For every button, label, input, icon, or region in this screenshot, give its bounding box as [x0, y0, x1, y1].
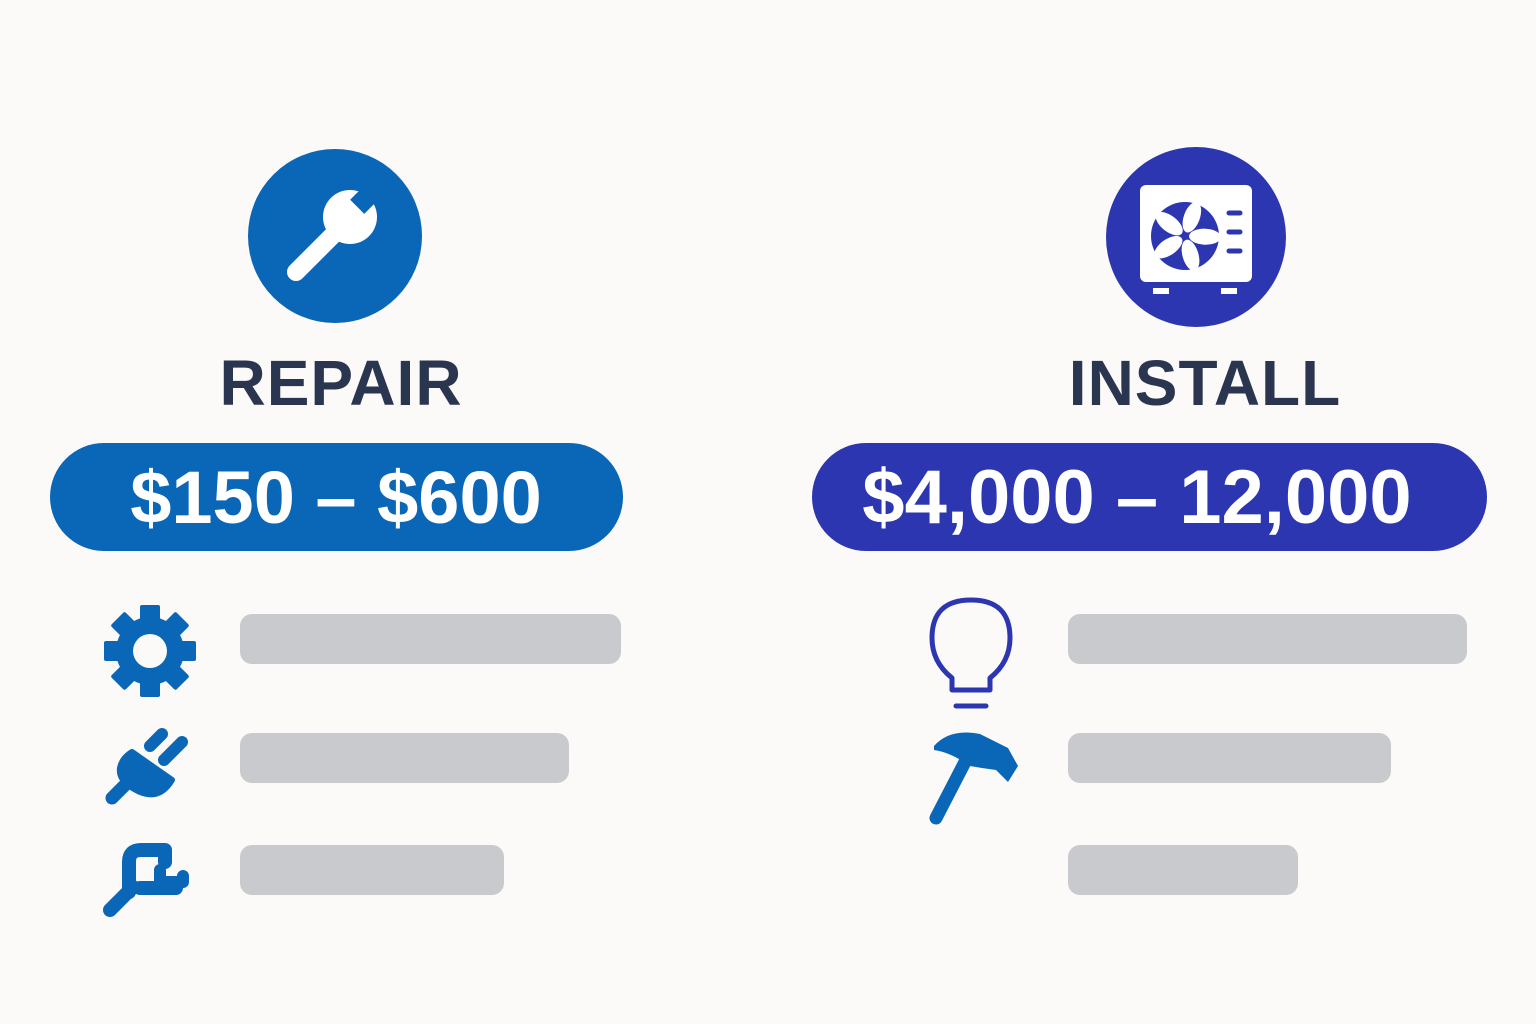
- icon: gear: [104, 605, 196, 697]
- price pill: repair: $150 – $600: [130, 456, 542, 539]
- price pill: install: [812, 443, 1487, 551]
- panel: repair: [50, 149, 623, 910]
- bars: install: [1068, 614, 1467, 895]
- heading: REPAIR: REPAIR: [219, 347, 463, 419]
- icon: plug: [112, 734, 182, 798]
- icon: pipe wrench: [110, 850, 183, 910]
- price pill: install: $4,000 – 12,000: [862, 455, 1412, 540]
- panel: install: [812, 147, 1487, 895]
- icon: light bulb: [932, 600, 1010, 706]
- icon: wrench circle: [248, 149, 422, 323]
- icon: AC unit circle: [1106, 147, 1286, 327]
- price pill: repair: [50, 443, 623, 551]
- bars: repair: [240, 614, 621, 895]
- icon: hammer: [934, 732, 1018, 818]
- heading: INSTALL: INSTALL: [1069, 347, 1341, 419]
